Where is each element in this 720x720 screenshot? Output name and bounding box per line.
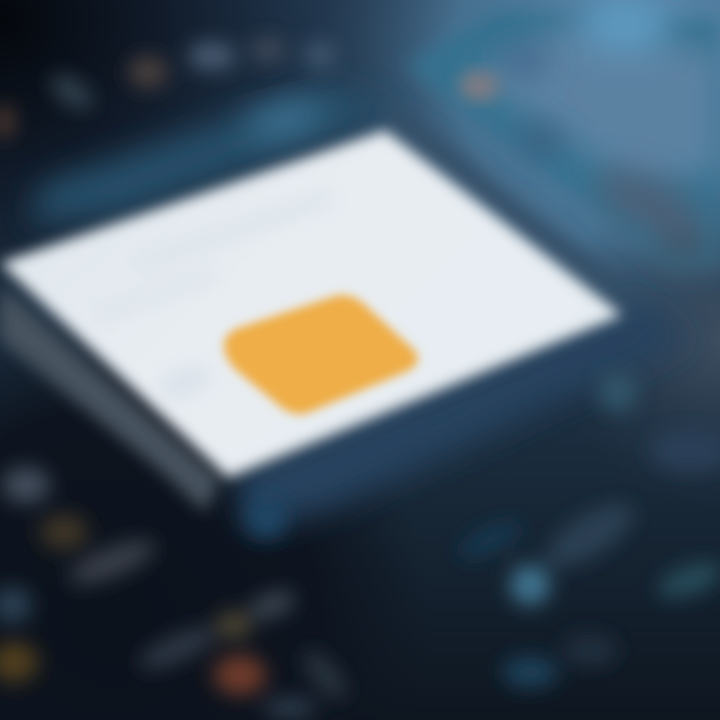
- panel: blue band above card: [30, 85, 400, 225]
- device dark smudges: [501, 48, 719, 266]
- keyboard smudges: lower-left keys: [0, 467, 353, 718]
- panel: lower-right spots: [246, 372, 720, 688]
- device bright corner: [580, 0, 670, 53]
- panel: dark gutter beside card: [385, 105, 650, 330]
- icon: orange square: [224, 295, 418, 414]
- device inner screen: [470, 20, 720, 190]
- panel: device bezel under card: [0, 285, 220, 512]
- device frame: [405, 10, 720, 265]
- keyboard smudges: top row: [0, 38, 336, 138]
- card text smudges: [92, 191, 336, 402]
- panel: shade under card: [230, 300, 690, 530]
- panel: top-right blue device: [405, 0, 720, 266]
- device amber spot: [459, 71, 499, 101]
- panel: white document card: [0, 130, 622, 478]
